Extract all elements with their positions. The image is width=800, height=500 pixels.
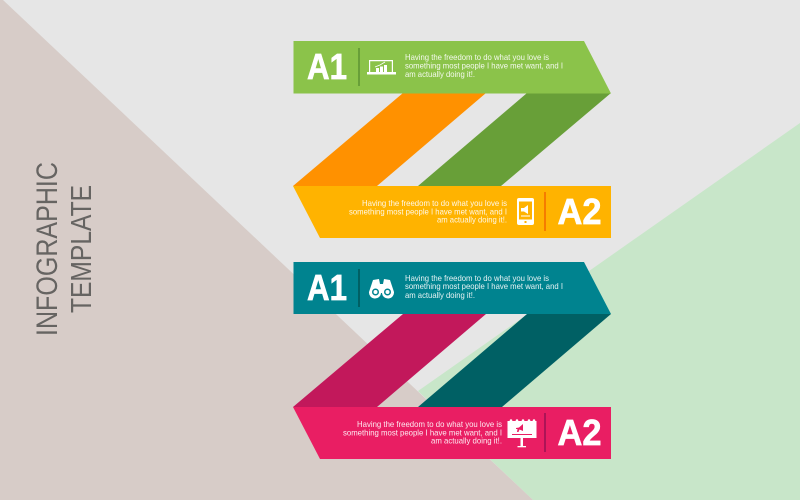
divider	[358, 48, 360, 86]
label A2: A2	[558, 191, 602, 232]
ribbon: magenta fold	[293, 314, 486, 407]
background: green triangle	[418, 123, 800, 500]
panel: pink A2	[293, 407, 611, 459]
description	[343, 419, 502, 446]
title	[31, 162, 98, 336]
panel: green A1	[294, 41, 611, 94]
description	[405, 273, 563, 300]
banner shape	[293, 407, 611, 459]
divider	[544, 413, 546, 452]
label A2: A2	[558, 412, 602, 453]
icon: laptop chart	[367, 60, 396, 74]
divider	[358, 269, 360, 307]
icon: billboard	[508, 419, 536, 447]
ribbon: dark green fold	[418, 93, 611, 186]
description: Having the freedom to do what you love is	[405, 52, 549, 62]
description: something most people I have met want, and I	[405, 281, 563, 291]
description: Having the freedom to do what you love is	[357, 419, 502, 429]
label A1: A1	[307, 46, 347, 87]
banner shape	[294, 262, 611, 314]
description: something most people I have met want, and I	[405, 60, 563, 70]
ribbon: dark teal fold	[418, 314, 611, 407]
description: Having the freedom to do what you love is	[405, 273, 549, 283]
label A1: A1	[307, 267, 347, 308]
description	[349, 198, 507, 224]
ribbon: orange fold	[293, 93, 486, 186]
title: TEMPLATE	[66, 185, 98, 313]
description: Having the freedom to do what you love is	[362, 198, 507, 208]
icon: phone megaphone	[517, 198, 534, 225]
banner shape	[294, 41, 611, 94]
icon: binoculars	[369, 279, 394, 299]
description: something most people I have met want, and I	[343, 428, 502, 438]
description	[405, 52, 563, 79]
description: am actually doing it!.	[405, 290, 475, 300]
background: beige triangle	[0, 0, 533, 500]
banner shape	[293, 186, 611, 238]
description: something most people I have met want, and I	[349, 206, 507, 216]
description: am actually doing it!.	[405, 69, 475, 79]
description: am actually doing it!.	[437, 214, 507, 224]
description: am actually doing it!.	[431, 436, 502, 446]
panel: teal A1	[294, 262, 611, 314]
title: INFOGRAPHIC	[31, 162, 64, 336]
divider	[544, 192, 546, 231]
panel: amber A2	[293, 186, 611, 238]
